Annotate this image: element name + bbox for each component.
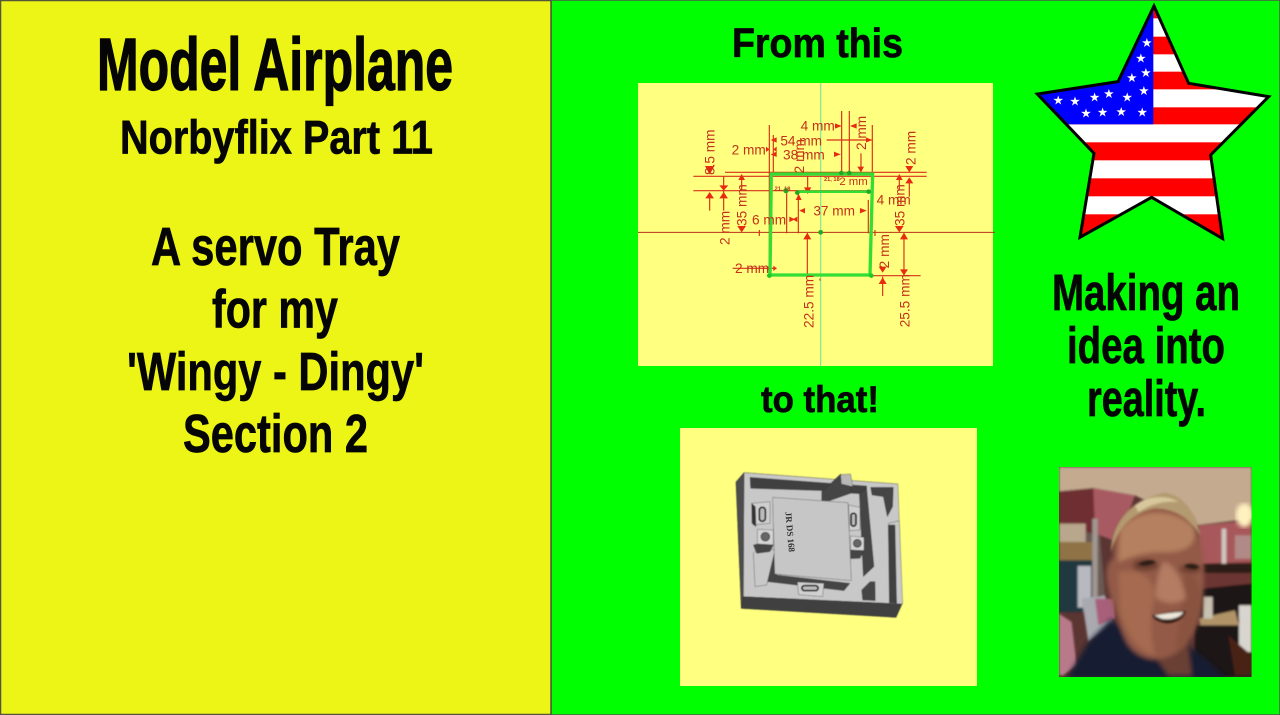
mouth [1152, 611, 1186, 623]
icon: American flag star: ★ [1053, 94, 1064, 108]
heading: to that: to that! [761, 379, 879, 420]
icon: American flag star: ★ [1097, 106, 1108, 120]
icon: American flag star [1030, 0, 1275, 245]
icon: American flag star: ★ [1137, 106, 1148, 120]
face [1107, 503, 1204, 659]
dimension labels: 2 mm [904, 131, 919, 165]
dimension labels: 22.5 mm [801, 275, 816, 328]
dimension labels: 35 mm [893, 184, 908, 226]
icon: American flag star: ★ [1122, 90, 1133, 104]
panel: right green background [551, 0, 1280, 715]
icon: American flag star: ★ [1135, 51, 1147, 65]
panel: left yellow title panel [0, 0, 551, 714]
text block: tagline: idea into [1067, 317, 1225, 374]
dimension labels: 4 mm [801, 118, 835, 133]
icon: American flag star: ★ [1141, 36, 1153, 50]
panel: 3D servo tray model [680, 428, 977, 686]
hair [1111, 493, 1200, 552]
lamp glow [1236, 503, 1253, 527]
dimension labels: 4 mm [877, 192, 911, 207]
text block: description: for my [212, 280, 338, 340]
text block: description: Section 2 [183, 404, 368, 464]
icon: American flag star: ★ [1138, 84, 1150, 98]
subtitle: Norbyflix Part 11 [120, 110, 433, 164]
photo: portrait of man in restaurant [1059, 467, 1253, 679]
dimension labels: 25.5 mm [897, 274, 912, 327]
eyes [1138, 561, 1156, 565]
text block: tagline: reality. [1087, 370, 1206, 427]
dimension labels: 21, 18 [824, 177, 840, 183]
dimension labels: 54 mm [780, 133, 822, 148]
tray label: JR DS 168 [783, 511, 797, 553]
dimension labels: 2 mm [854, 116, 869, 150]
heading: from this: From this [732, 20, 903, 66]
neck [1156, 644, 1195, 677]
text block: description: 'Wingy - Dingy' [127, 342, 424, 402]
text block: tagline [1052, 264, 1240, 427]
dimension lines [693, 111, 927, 296]
dimension labels [703, 116, 919, 328]
title: Model Airplane [97, 23, 453, 106]
icon: American flag star: ★ [1089, 91, 1100, 105]
icon: American flag star: ★ [1140, 66, 1152, 80]
dimension labels: 35 mm [735, 184, 750, 226]
tray body [736, 473, 903, 617]
dimension labels: 2 mm [732, 142, 766, 157]
dimension labels: 2 mm [839, 176, 868, 188]
icon: American flag star: ★ [1126, 71, 1138, 85]
icon: American flag star: ★ [1069, 95, 1081, 109]
text block: description [127, 217, 424, 464]
dimension labels: 2 mm [717, 211, 732, 245]
dimension arrowheads [705, 123, 913, 284]
text block: description: A servo Tray [151, 217, 400, 277]
dimension labels: 37 mm [813, 204, 855, 219]
panel: CAD sketch drawing [638, 83, 995, 366]
icon: American flag star: ★ [1116, 105, 1127, 119]
dimension labels: 38 mm [783, 148, 825, 163]
dimension labels: 21, 18 [775, 187, 790, 193]
dimension labels: 2 mm [735, 261, 769, 276]
shirt [1067, 619, 1227, 679]
dimension labels: 2 mm [877, 234, 892, 268]
dimension labels: 6 mm [752, 212, 786, 227]
tray outline in green [767, 171, 874, 278]
dimension labels: 8.5 mm [703, 129, 718, 175]
axis lines [638, 83, 995, 366]
icon: American flag star: ★ [1080, 106, 1092, 120]
dimension labels: 2 mm [792, 139, 807, 173]
icon: American flag star: ★ [1103, 87, 1115, 101]
